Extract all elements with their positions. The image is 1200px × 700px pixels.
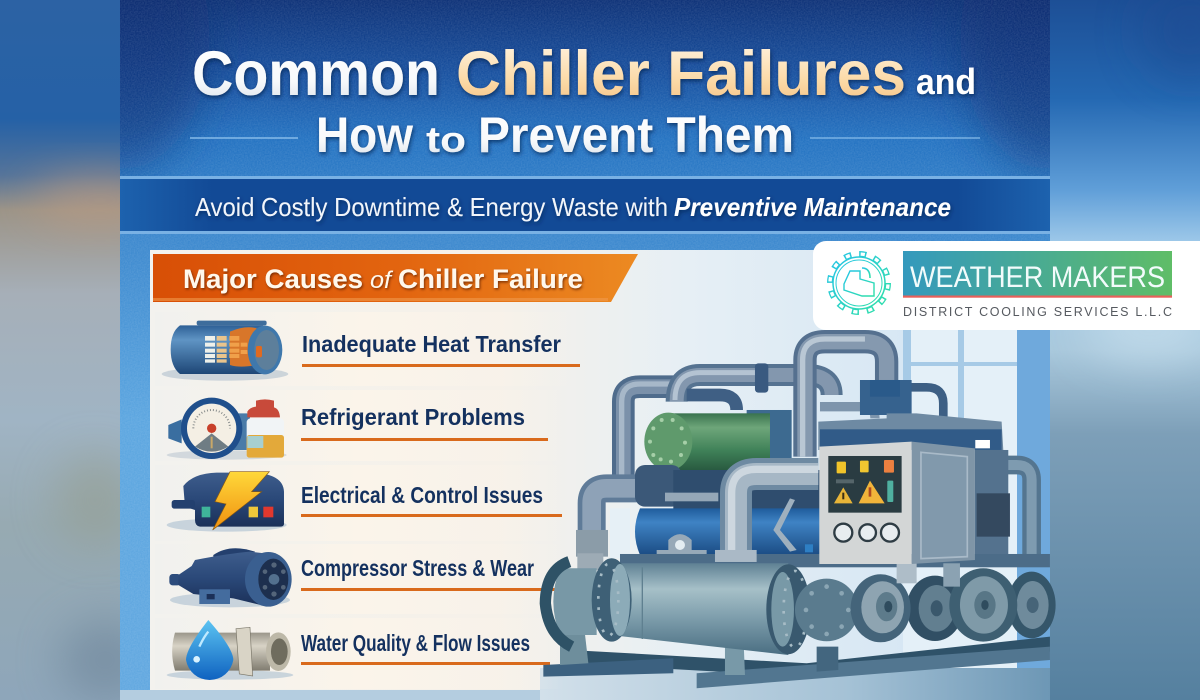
label: Refrigerant Problems — [301, 404, 525, 430]
heading banner: major causes: Chiller Failure — [398, 264, 583, 294]
icon: gauge and refrigerant bottle — [167, 398, 287, 460]
icon: compressor — [169, 548, 292, 607]
cause 1: inadequate heat transfer — [162, 321, 580, 381]
top housing — [818, 380, 1010, 557]
weather makers wordmark: WEATHER MAKERS — [910, 261, 1165, 294]
subtitle band — [120, 176, 1050, 234]
title: Chiller Failures — [456, 39, 906, 109]
pump wheels — [851, 563, 1056, 642]
large shell and tube vessel — [545, 558, 858, 655]
cause 2: refrigerant problems — [167, 398, 548, 460]
mid assembly and blue shell — [610, 465, 1050, 567]
label: Inadequate Heat Transfer — [302, 331, 561, 357]
icon: control module with lightning bolt — [167, 472, 287, 532]
left blurred background strip — [0, 134, 120, 700]
title flanking lines — [190, 137, 980, 139]
main poster background — [120, 0, 1050, 690]
illustration: industrial chiller — [543, 339, 1056, 688]
title: Common — [192, 39, 440, 109]
logo card — [813, 241, 1200, 330]
label: Compressor Stress & Wear — [301, 555, 534, 581]
company descriptor: DISTRICT COOLING SERVICES L.L.C — [903, 305, 1172, 319]
panel: chiller scene backdrop — [120, 250, 1050, 700]
dial gauges — [834, 524, 899, 542]
right blurred background strip — [1050, 0, 1200, 700]
heading banner: major causes — [153, 254, 638, 302]
front elbow pipe — [576, 469, 818, 570]
icon: cyan gear with machine — [830, 254, 888, 312]
warning triangles — [834, 481, 885, 503]
green receiver tank — [644, 410, 792, 471]
subtitle band: Avoid Costly Downtime & Energy Waste with — [195, 192, 668, 222]
weather makers wordmark — [903, 251, 1172, 298]
feet and base rails — [543, 620, 1050, 688]
title — [192, 39, 976, 163]
back pipes — [592, 339, 1032, 560]
title: How — [316, 107, 413, 163]
indicator lamps — [837, 460, 894, 473]
cause 5: water quality and flow issues — [167, 620, 550, 680]
title: and — [916, 61, 976, 102]
cause rows backgrounds — [155, 312, 575, 689]
icon: heat exchanger cylinder — [162, 321, 288, 381]
title: Prevent Them — [478, 107, 794, 163]
heading banner: major causes: Major Causes — [183, 264, 363, 294]
cause 3: electrical and control issues — [167, 472, 562, 532]
label: Water Quality & Flow Issues — [301, 630, 530, 656]
subtitle band: Preventive Maintenance — [674, 192, 951, 222]
cause 4: compressor stress and wear — [169, 548, 555, 607]
control panel — [819, 442, 975, 564]
heading banner: major causes: of — [370, 267, 393, 294]
icon: pipe fitting with water drop — [167, 620, 293, 680]
title: to — [426, 119, 466, 160]
label: Electrical & Control Issues — [301, 482, 543, 508]
